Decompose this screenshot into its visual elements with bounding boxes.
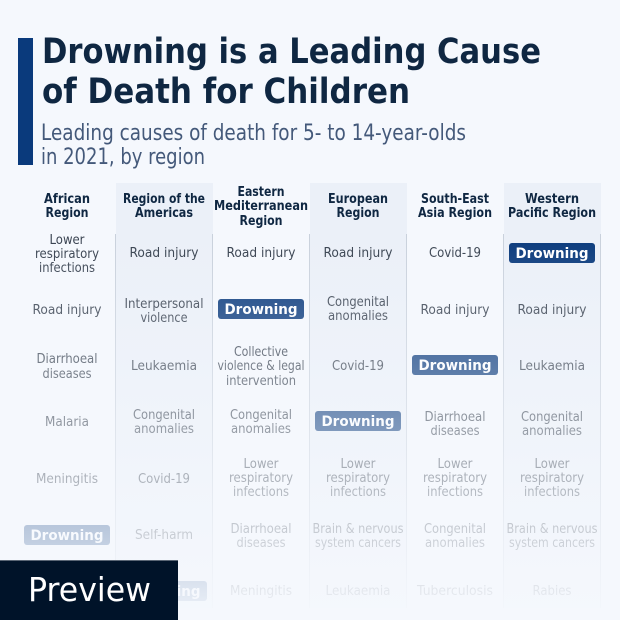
- column: Region of the Americas: [121, 245, 207, 601]
- column headers: Americas: [135, 206, 193, 221]
- column: European Region: Leukaemia: [326, 583, 390, 599]
- column: African Region: Drowning: [30, 528, 104, 544]
- column: South-East Asia Region: Tuberculosis: [416, 583, 493, 599]
- column: Region of the Americas: anomalies: [134, 421, 194, 437]
- column: Eastern Mediterranean Region: Congenital: [230, 407, 292, 423]
- column headers: European: [328, 192, 388, 207]
- column: Eastern Mediterranean Region: Collective: [234, 344, 288, 360]
- column headers: Region of the: [123, 192, 205, 207]
- column: Western Pacific Region: Road injury: [518, 302, 587, 318]
- column: Western Pacific Region: Brain & nervous: [506, 521, 598, 537]
- column: Region of the Americas: Drowning: [128, 584, 200, 600]
- column: Eastern Mediterranean Region: intervention: [226, 373, 296, 389]
- column: Eastern Mediterranean Region: Meningitis: [230, 583, 292, 599]
- column: Eastern Mediterranean Region: violence & legal: [218, 358, 304, 374]
- column: European Region: Covid-19: [332, 358, 384, 374]
- column: Western Pacific Region: [506, 243, 598, 599]
- column: Region of the Americas: Self-harm: [135, 527, 193, 543]
- column: Eastern Mediterranean Region: diseases: [236, 535, 286, 551]
- column shading: [116, 183, 601, 608]
- fade overlay: [0, 234, 620, 620]
- column: Eastern Mediterranean Region: anomalies: [231, 421, 291, 437]
- column: African Region: infections: [39, 260, 95, 276]
- subtitle: in 2021, by region: [41, 145, 205, 170]
- column: South-East Asia Region: anomalies: [425, 535, 485, 551]
- column: South-East Asia Region: Road injury: [420, 302, 490, 318]
- column: Region of the Americas: Congenital: [133, 407, 195, 423]
- column: South-East Asia Region: [412, 245, 498, 599]
- title: [42, 32, 541, 112]
- column headers: Region: [240, 214, 282, 229]
- column: African Region: respiratory: [35, 246, 99, 262]
- subtitle: Leading causes of death for 5- to 14-year-olds: [41, 121, 466, 146]
- column: Eastern Mediterranean Region: Lower: [244, 456, 279, 472]
- column: European Region: [312, 245, 404, 599]
- column: African Region: Meningitis: [36, 471, 98, 487]
- column: Western Pacific Region: Lower: [534, 456, 570, 472]
- column: Western Pacific Region: infections: [524, 484, 580, 500]
- title: of Death for Children: [42, 72, 410, 112]
- column: Region of the Americas: Leukaemia: [131, 358, 197, 374]
- preview badge: Preview: [28, 570, 151, 609]
- column: South-East Asia Region: Drowning: [418, 358, 492, 374]
- column: African Region: Diarrhoeal: [36, 351, 98, 367]
- column: Western Pacific Region: system cancers: [509, 535, 595, 551]
- column: Eastern Mediterranean Region: Diarrhoeal: [230, 521, 292, 537]
- column: Eastern Mediterranean Region: Road injury: [226, 245, 296, 261]
- column: Western Pacific Region: Congenital: [521, 409, 583, 425]
- column: African Region: Malaria: [45, 414, 89, 430]
- column headers: Asia Region: [418, 206, 492, 221]
- preview badge: [0, 560, 178, 620]
- column: European Region: Drowning: [322, 414, 394, 430]
- column: South-East Asia Region: Diarrhoeal: [424, 409, 486, 425]
- column: Region of the Americas: Interpersonal: [124, 296, 204, 312]
- column: African Region: Lower: [50, 232, 85, 248]
- column: South-East Asia Region: respiratory: [423, 470, 487, 486]
- column headers: South-East: [421, 192, 489, 207]
- column headers: Eastern: [238, 185, 284, 200]
- subtitle: [41, 121, 466, 170]
- column: Western Pacific Region: Leukaemia: [519, 358, 585, 374]
- column headers: Western: [525, 192, 579, 207]
- column: African Region: diseases: [42, 366, 92, 382]
- column: European Region: Brain & nervous: [312, 521, 404, 537]
- column headers: Region: [46, 206, 88, 221]
- column: Eastern Mediterranean Region: Drowning: [224, 302, 298, 318]
- column: European Region: Lower: [340, 456, 376, 472]
- column: Eastern Mediterranean Region: infections: [233, 484, 289, 500]
- column: Western Pacific Region: respiratory: [520, 470, 584, 486]
- column headers: Pacific Region: [508, 206, 596, 221]
- column: South-East Asia Region: Congenital: [424, 521, 486, 537]
- column: African Region: Road injury: [32, 302, 102, 318]
- column: Eastern Mediterranean Region: [218, 245, 304, 599]
- column: Western Pacific Region: Rabies: [532, 583, 572, 599]
- column: South-East Asia Region: Lower: [438, 456, 473, 472]
- column headers: Region: [336, 206, 380, 221]
- title: Drowning is a Leading Cause: [42, 32, 541, 72]
- column: European Region: Congenital: [327, 294, 389, 310]
- column: Western Pacific Region: anomalies: [522, 423, 582, 439]
- column: South-East Asia Region: infections: [427, 484, 483, 500]
- column headers: African: [44, 192, 90, 207]
- column: South-East Asia Region: diseases: [430, 423, 480, 439]
- column: Western Pacific Region: Drowning: [516, 246, 588, 262]
- column: European Region: system cancers: [315, 535, 401, 551]
- title accent bar: [18, 38, 33, 165]
- column: Region of the Americas: Covid-19: [138, 471, 190, 487]
- column: Eastern Mediterranean Region: respiratory: [229, 470, 293, 486]
- column: South-East Asia Region: Covid-19: [429, 245, 481, 261]
- column: Region of the Americas: violence: [140, 310, 188, 326]
- column: European Region: respiratory: [326, 470, 390, 486]
- column headers: [44, 185, 596, 229]
- column: African Region: [24, 232, 110, 545]
- table: [24, 183, 601, 608]
- column: European Region: Road injury: [324, 245, 393, 261]
- column dividers: [115, 234, 601, 608]
- column: European Region: infections: [330, 484, 386, 500]
- column: European Region: anomalies: [328, 308, 388, 324]
- column: Region of the Americas: Road injury: [130, 245, 199, 261]
- column headers: Mediterranean: [214, 199, 308, 214]
